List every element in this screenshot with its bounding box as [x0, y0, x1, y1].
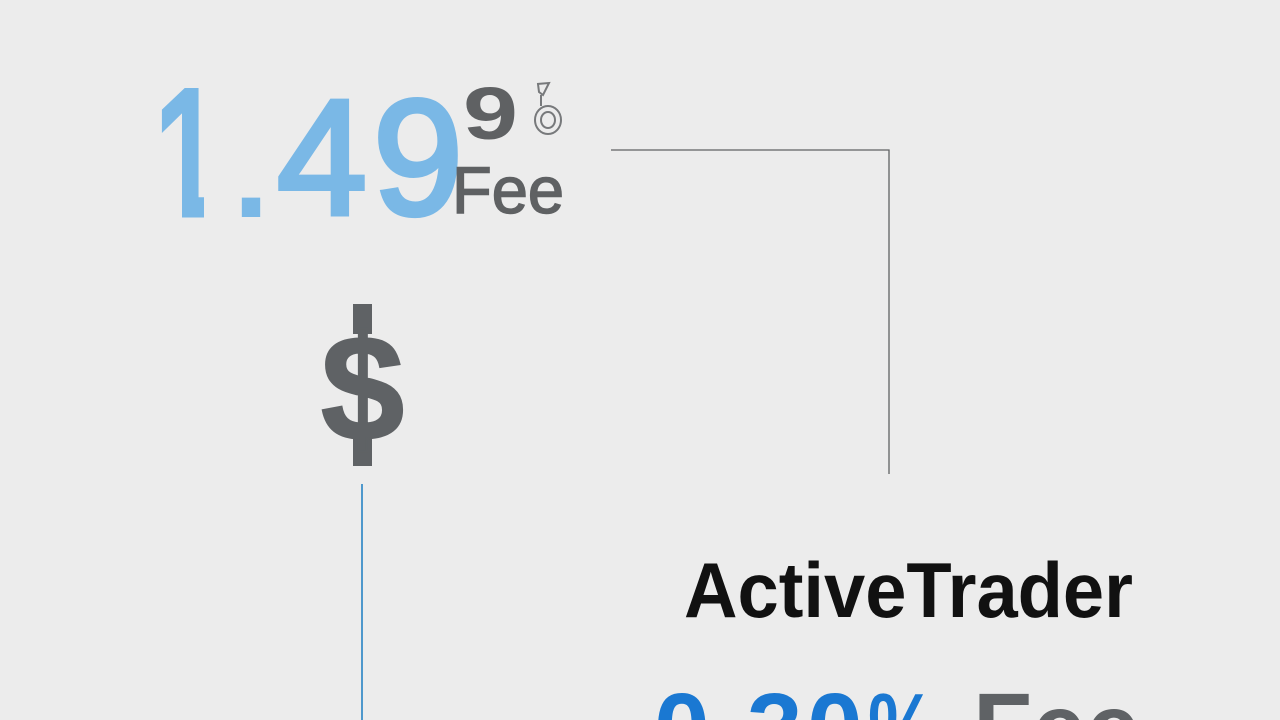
fee label: Fee — [452, 153, 564, 227]
large fee number: 9 — [373, 66, 463, 249]
ActiveTrader fee figure: 0.30% Fee — [654, 673, 1140, 720]
icon: garbled percent sign — [535, 83, 561, 134]
small trailing digit: 9 — [463, 72, 518, 155]
icon: dollar sign: $ — [321, 304, 404, 472]
ActiveTrader heading: ActiveTrader — [684, 546, 1133, 634]
connector: elbow line to ActiveTrader — [611, 150, 889, 474]
large fee number: . — [233, 99, 269, 245]
fee percentage — [654, 673, 936, 720]
connector: blue vertical line — [361, 484, 363, 720]
fee comparison infographic — [162, 82, 1133, 720]
large fee number: 4 — [277, 66, 367, 249]
standard fee figure: 1.49% Fee — [162, 82, 562, 218]
large fee number — [162, 88, 458, 218]
large fee number: 1 — [152, 53, 224, 252]
